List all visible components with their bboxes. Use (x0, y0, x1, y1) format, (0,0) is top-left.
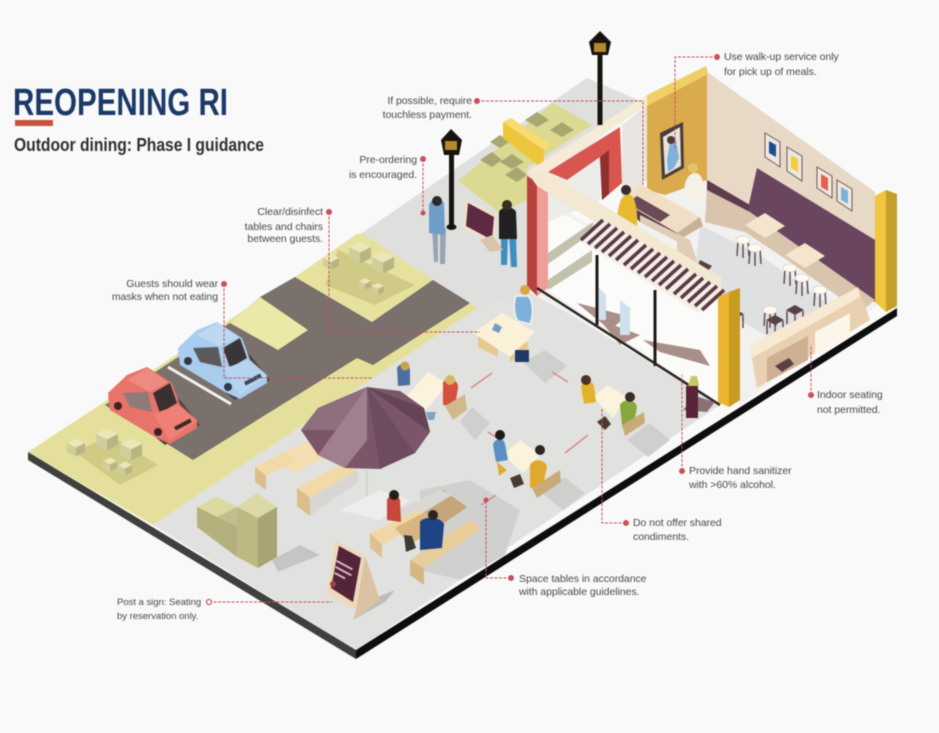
gold wall top (647, 66, 708, 106)
rear yellow column (875, 190, 897, 312)
callout: hand sanitizer: Provide hand sanitizer (689, 465, 792, 477)
title accent bar (15, 120, 53, 126)
interior floor (528, 170, 885, 405)
lower wall beige (705, 190, 875, 312)
green lawn plants (480, 112, 574, 182)
hand sanitizer stand (683, 376, 715, 418)
callout: touchless payment: If possible, require (387, 95, 472, 107)
parking lot asphalt (105, 277, 470, 460)
lamp post rear (589, 31, 611, 125)
umbrella shadow (340, 490, 410, 520)
lower plaza floor (153, 290, 720, 650)
front yellow column (718, 288, 740, 407)
callout: condiments: condiments. (633, 531, 689, 543)
callout: condiments (602, 408, 722, 543)
wainscot stripe (707, 180, 750, 213)
left base edge (28, 452, 356, 659)
callout: post a sign: Post a sign: Seating (117, 597, 201, 608)
staff member (684, 163, 704, 201)
lower picnic table (370, 490, 482, 585)
table group 1 (473, 285, 535, 362)
blue car (178, 322, 270, 400)
shadow lower cubes (75, 435, 158, 485)
shadow lawn cubes (325, 250, 415, 305)
rear outdoor view through frame (548, 222, 593, 290)
cream roof beam back (527, 95, 647, 182)
callout: clean tables (245, 206, 480, 332)
green lawn behind building (458, 103, 592, 213)
cream roof beam front (527, 170, 722, 300)
callout: indoor seating: Indoor seating (817, 389, 883, 401)
red wall back (548, 127, 622, 200)
person waiting blue jacket (429, 196, 446, 264)
callout: pre-ordering: is encouraged. (349, 169, 417, 181)
callout: masks: Guests should wear (126, 278, 219, 290)
planter block (197, 493, 320, 572)
callout: table spacing: Space tables in accordance (519, 573, 647, 585)
callout: pre-ordering: Pre-ordering (359, 154, 417, 166)
lower lawn cubes (67, 428, 142, 476)
red inner return (600, 150, 609, 200)
patio umbrella (301, 387, 430, 469)
white back room (548, 155, 600, 222)
callout: table spacing: with applicable guidelines. (518, 586, 639, 598)
umbrella pole (367, 470, 382, 510)
right base edge (356, 308, 897, 659)
indoor tables and stools (697, 213, 827, 338)
callout: post a sign: by reservation only. (117, 611, 198, 622)
table group 2 (397, 362, 467, 420)
callout: clean tables: tables and chairs (245, 221, 323, 233)
plexiglass stands (596, 285, 630, 335)
yellow parking island (230, 297, 308, 350)
gray floor rug (695, 225, 850, 350)
glass wall interior (547, 205, 718, 400)
parking lines (168, 367, 231, 404)
callout: pre-ordering (349, 154, 426, 216)
red car (108, 367, 200, 445)
art frames (765, 133, 852, 211)
callout: condiments: Do not offer shared (633, 517, 722, 529)
reservation sign (327, 540, 395, 620)
beige wall (707, 72, 875, 300)
customer at counter (617, 185, 637, 226)
yellow low wall (503, 118, 552, 170)
gold wall panel (647, 68, 707, 195)
table shadows (460, 350, 670, 510)
picnic shadow (420, 480, 520, 580)
isometric scene (28, 31, 897, 659)
grass strip (28, 233, 478, 525)
callout: indoor seating (808, 345, 883, 416)
callout: hand sanitizer: with >60% alcohol. (688, 479, 776, 491)
callout: post a sign (117, 597, 332, 622)
callout: clean tables: between guests. (247, 233, 323, 245)
lawn cubes (323, 242, 394, 295)
callout: indoor seating: not permitted. (817, 404, 880, 416)
upper plaza (362, 78, 645, 308)
callout: masks: masks when not eating (112, 291, 218, 303)
glass base rail (537, 288, 720, 405)
callout: masks (112, 278, 373, 378)
upper picnic table (255, 440, 358, 516)
callout: walk-up service: Use walk-up service only (724, 51, 839, 63)
callout: table spacing (484, 498, 647, 598)
counter (620, 184, 703, 270)
low front partition (750, 287, 870, 388)
lawn island with cubes (295, 233, 430, 322)
callout: touchless payment: touchless payment. (383, 109, 472, 121)
purple bench back (747, 168, 875, 302)
back grey wall (622, 105, 647, 200)
table group 3 (581, 375, 645, 436)
picture window with staff (660, 122, 684, 180)
interior beyond glass (577, 303, 710, 366)
callout: clean tables: Clear/disinfect (257, 206, 323, 218)
callout: touchless payment (383, 95, 643, 185)
callout: walk-up service: for pick up of meals. (724, 66, 817, 78)
awning (580, 220, 724, 313)
lamp post front (441, 129, 462, 230)
rear sign board (463, 198, 503, 252)
building (527, 66, 897, 407)
glass mullions (597, 255, 655, 366)
table group 4 (493, 430, 561, 498)
title: REOPENING RI (13, 82, 228, 124)
red column (527, 176, 548, 296)
spacing marks (471, 372, 588, 505)
callout: walk-up service (675, 51, 839, 150)
subtitle: Outdoor dining: Phase I guidance (14, 135, 264, 155)
person waiting black jacket (499, 200, 517, 267)
callout: hand sanitizer (679, 375, 792, 491)
